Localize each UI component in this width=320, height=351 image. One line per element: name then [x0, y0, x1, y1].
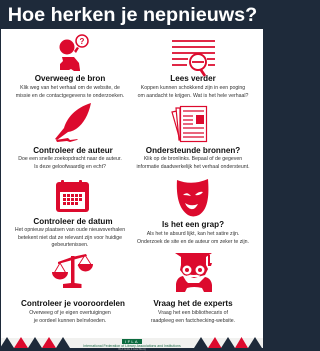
- icon: quill: [55, 103, 91, 142]
- card: Ondersteunde bronnen: [136, 146, 250, 170]
- text: informatie daadwerkelijk het verhaal ondersteunt.: [136, 164, 250, 170]
- text: Vraag het de experts: [153, 298, 233, 308]
- icon: person with question: ?: [80, 37, 85, 46]
- icon: lines with magnifier: [172, 41, 215, 76]
- text: Controleer je vooroordelen: [21, 298, 125, 308]
- IFLA logo: [122, 339, 142, 344]
- card: Is het een grap: [137, 220, 249, 245]
- text: gebeurtenissen.: [52, 242, 88, 248]
- text: je oordeel kunnen beïnvloeden.: [34, 318, 106, 324]
- footer band: [0, 338, 264, 351]
- text: Controleer de datum: [33, 216, 113, 226]
- card: Overweeg de bron: [16, 74, 124, 98]
- text: Vraag het een bibliothecaris of: [158, 310, 228, 316]
- text: Lees verder: [170, 74, 216, 82]
- icon: owl with graduation cap: [175, 253, 212, 292]
- text: missie en de contactgegevens te onderzoeken.: [16, 92, 124, 98]
- card: Controleer de auteur: [18, 146, 122, 170]
- footer credit: IFLA Guide & www.ifla.org: [118, 348, 146, 351]
- text: Onderzoek de site en de auteur om zeker te zijn.: [137, 239, 249, 245]
- white panel: [1, 29, 263, 348]
- icon: scales: [52, 254, 93, 288]
- IFLA logo: IFLA: [125, 339, 139, 344]
- text: Klik weg van het verhaal om de website, de: [20, 84, 120, 90]
- text: Controleer de auteur: [33, 146, 113, 154]
- text: Ondersteunde bronnen?: [146, 146, 240, 154]
- footer triangles right: [194, 337, 262, 348]
- text: raadpleeg een factchecking-website.: [151, 318, 235, 324]
- text: Overweeg de bron: [35, 74, 105, 82]
- icon: mask: [177, 179, 208, 216]
- footer organisation name: International Federation of Library Associations and Institutions: [83, 344, 181, 348]
- icon: person with question: [60, 35, 88, 71]
- card: Lees verder: [138, 74, 248, 98]
- text: Doe een snelle zoekopdracht naar de auteur.: [18, 156, 122, 162]
- text: Koppen kunnen schokkend zijn in een poging: [141, 84, 245, 90]
- text: Klik op de bronlinks. Bepaal of de gegeven: [144, 156, 242, 162]
- text: Als het te absurd lijkt, kan het satire zijn.: [147, 231, 239, 237]
- text: Is deze geloofwaardig en echt?: [34, 164, 106, 170]
- text: Is het een grap?: [162, 220, 224, 229]
- card: Controleer je vooroordelen: [21, 298, 125, 324]
- text: om aandacht te krijgen. Wat is het hele verhaal?: [138, 92, 248, 98]
- card: Vraag het de experts: [151, 298, 235, 324]
- card: Controleer de datum: [15, 216, 125, 248]
- text: betekent niet dat ze relevant zijn voor huidige: [18, 235, 122, 241]
- title: Hoe herken je nepnieuws?: [8, 4, 257, 26]
- text: Overweeg of je eigen overtuigingen: [29, 310, 111, 316]
- footer triangles left: [0, 337, 70, 348]
- text: Het opnieuw plaatsen van oude nieuwsverhalen: [15, 227, 125, 233]
- icon: newspaper: [172, 106, 206, 142]
- icon: calendar: [56, 180, 89, 212]
